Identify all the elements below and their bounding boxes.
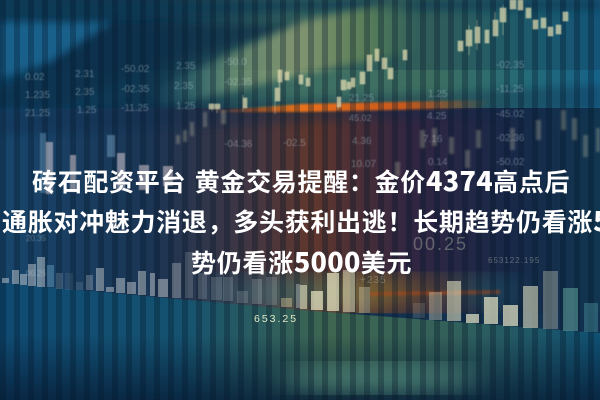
faint number labels: 10.07: [351, 159, 376, 170]
faint number labels: -50.0: [224, 57, 247, 68]
faint number labels: -11.25: [496, 84, 524, 95]
faint number labels: 1.25: [77, 105, 97, 116]
faint number labels: -45.02: [496, 109, 525, 120]
faint number labels: 21.25: [349, 93, 374, 104]
candlestick series faded: [176, 110, 600, 176]
faint number labels: 4.36: [352, 136, 372, 147]
faint value 653122.195: 653122.195: [488, 256, 540, 265]
faint number labels: 1.25: [176, 101, 196, 112]
faint value +235: +235: [360, 275, 387, 286]
bar chart upper left: [40, 133, 173, 194]
faint number labels: -02.36: [496, 133, 525, 144]
title line 1: 砖石配资平台 黄金交易提醒：金价4374高点后: [32, 160, 570, 199]
faint number labels: 21.25: [25, 108, 50, 119]
title line 2: 通胀对冲魅力消退，多头获利出逃！长期趋势仍看涨5: [2, 200, 600, 239]
faint number labels: -02.35: [121, 84, 150, 95]
faint number labels: 0.02: [25, 72, 45, 83]
faint number labels: -02.35: [496, 60, 525, 71]
faint number labels: 2.35: [75, 87, 95, 98]
faint number labels: 0.14: [428, 157, 448, 168]
faint number labels: 1.25: [428, 89, 448, 100]
title line 3: 势仍看涨5000美元: [191, 241, 412, 280]
faint number labels: 45.02: [349, 113, 372, 123]
faint number labels: 1.235: [25, 90, 50, 101]
bar chart: [2, 252, 300, 308]
candlestick series upper: [209, 0, 568, 114]
faint number labels: 2.35: [174, 81, 194, 92]
faint number labels: 4.25: [427, 111, 447, 122]
faint number labels: -02.35: [224, 77, 253, 88]
faint number labels: 00.25: [26, 269, 47, 278]
faint number labels: [25, 57, 525, 278]
faint number labels: -11.25: [121, 103, 149, 114]
faint number labels: 2.31: [75, 69, 95, 80]
value label 653.25: 653.25: [254, 313, 298, 325]
faint large value 00.25: 00.25: [413, 234, 468, 254]
faint number labels: 2.35: [176, 61, 196, 72]
faint number labels: -02.5: [283, 138, 306, 149]
faint number labels: 20.35: [26, 234, 47, 243]
bar chart right: [300, 270, 598, 332]
faint number labels: 7.16: [423, 134, 443, 145]
faint number labels: -50.02: [121, 64, 150, 75]
faint number labels: -50.02: [496, 157, 525, 168]
faint number labels: -04.36: [224, 139, 253, 150]
